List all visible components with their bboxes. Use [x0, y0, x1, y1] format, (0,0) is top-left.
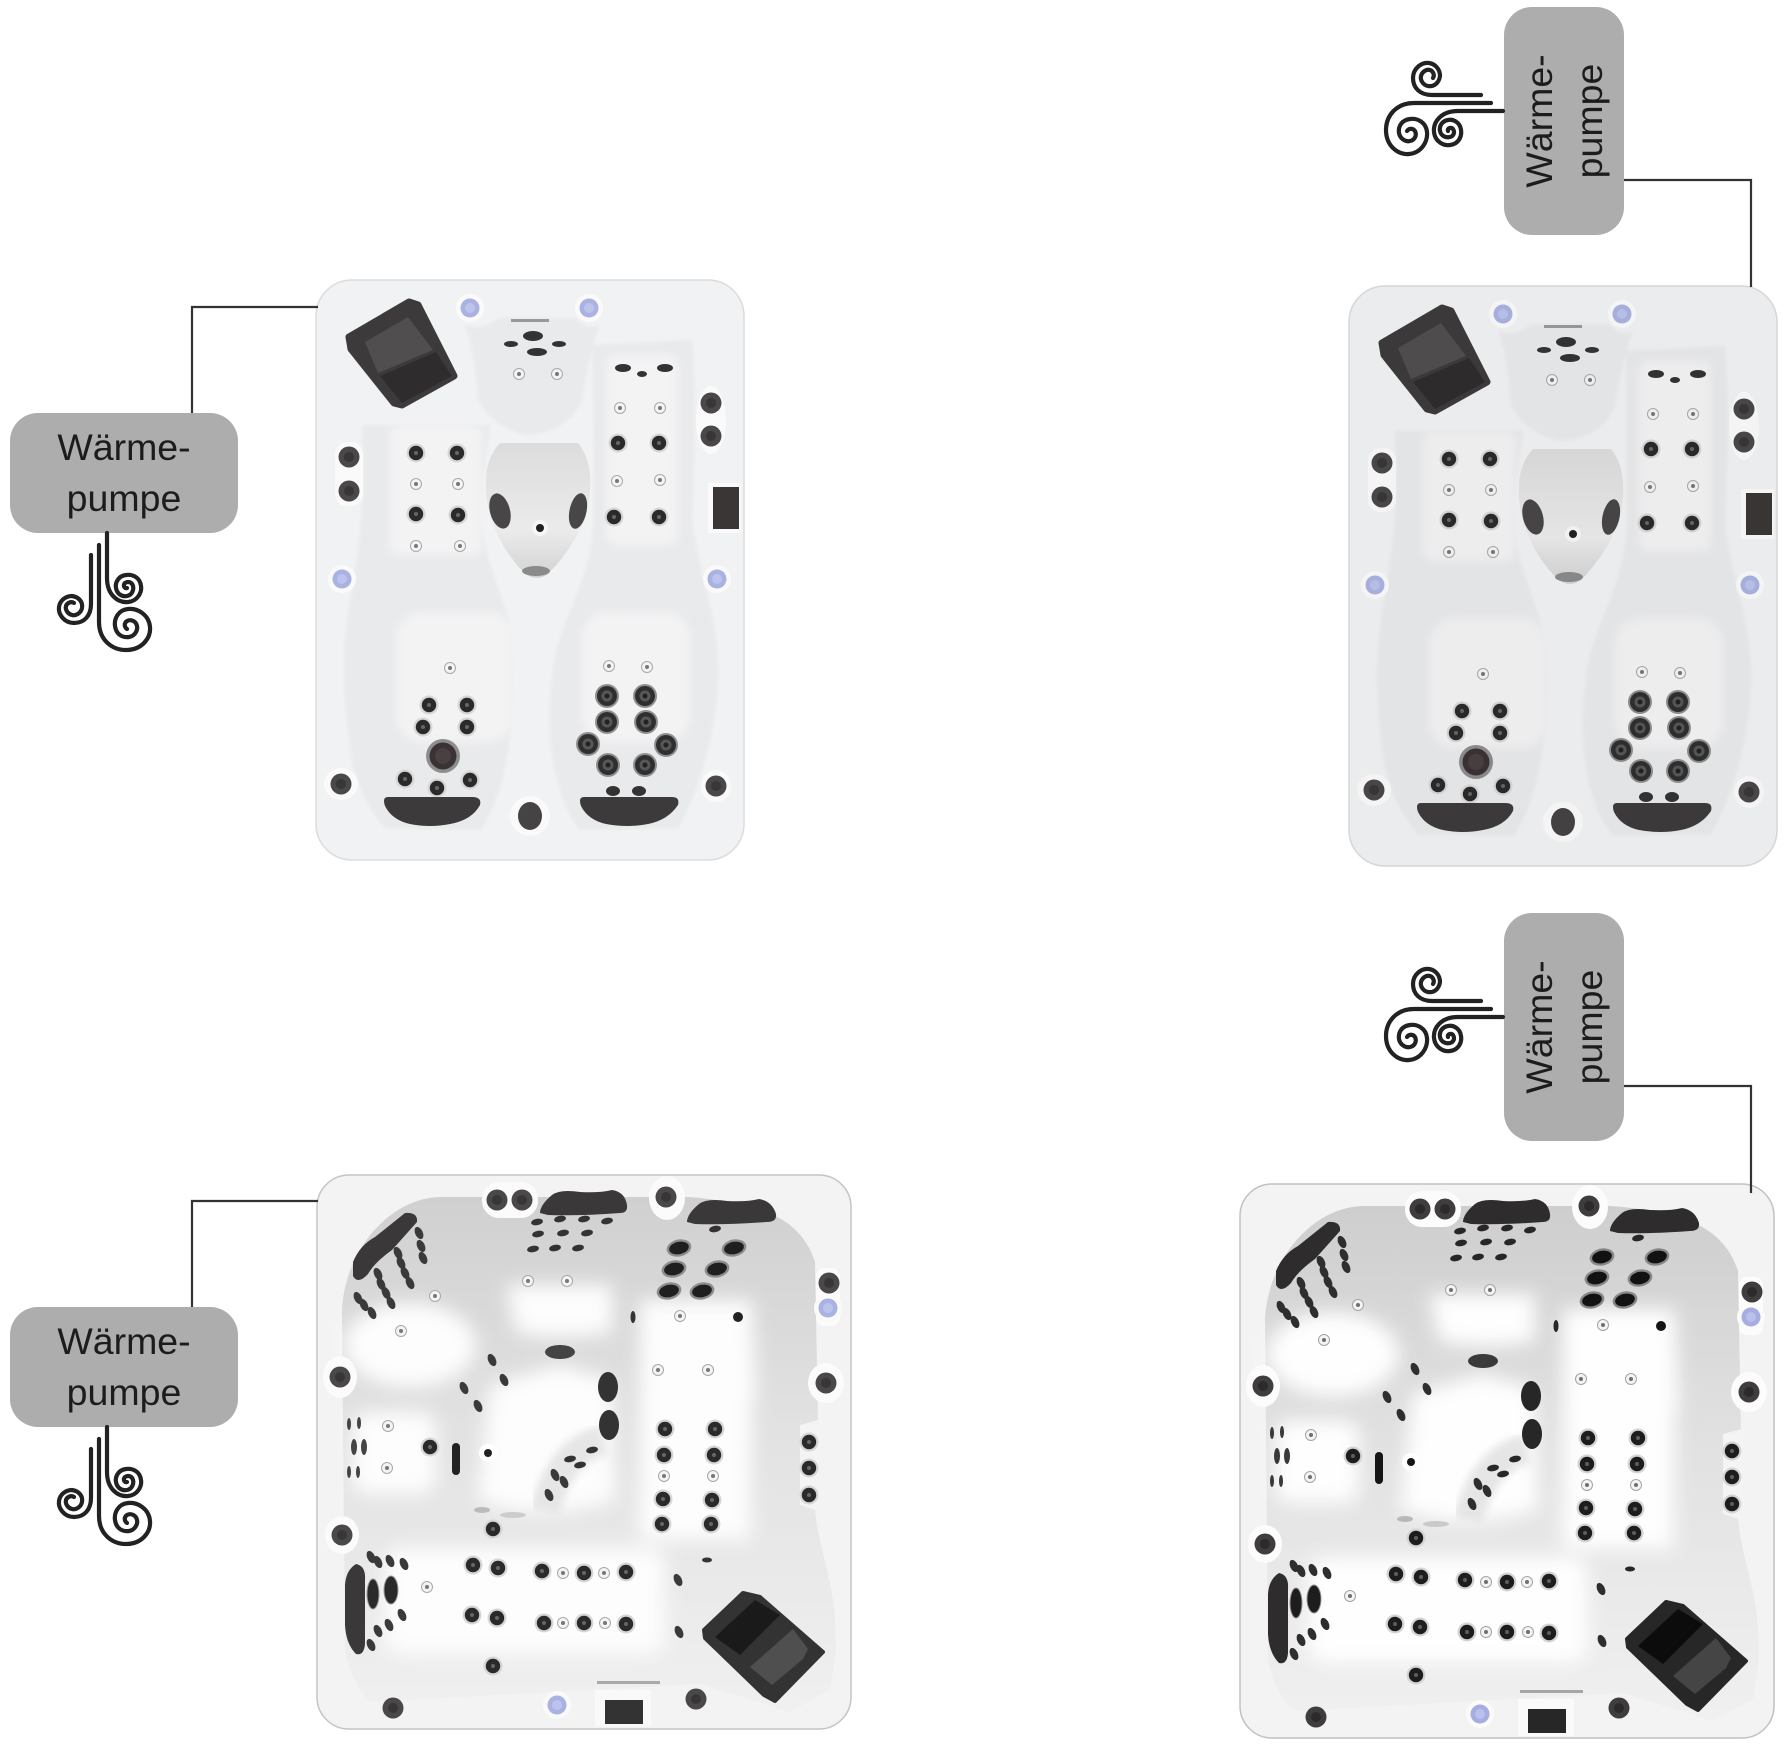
tub: large spa, bottom right [1240, 1184, 1774, 1738]
label text: pumpe [1568, 64, 1610, 178]
footwell cushions [452, 1345, 619, 1518]
jets: left foot area [396, 662, 480, 798]
jets: west seat [347, 1417, 440, 1478]
seat wells [344, 318, 718, 830]
blue lights [328, 294, 731, 593]
label box [1504, 913, 1624, 1141]
connector line [192, 1201, 318, 1307]
jets: back rows [406, 364, 673, 552]
label text: pumpe [1568, 970, 1610, 1084]
label text: Wärme- [1518, 54, 1560, 188]
jets: footwell and arc [458, 1353, 598, 1502]
tub shell [316, 280, 744, 860]
footwell [486, 443, 590, 578]
connector line [1624, 180, 1751, 287]
interior bowl [342, 1197, 836, 1712]
icon: wind [59, 533, 150, 650]
label text: Wärme- [57, 426, 191, 468]
tub: two-seat spa, top right [1349, 286, 1777, 866]
tub: large spa, bottom left [317, 1175, 851, 1729]
jets: right foot area [576, 660, 678, 796]
blue lights [543, 1294, 842, 1719]
heat pump unit: bottom right [1386, 913, 1751, 1193]
label box [10, 1307, 238, 1427]
label box [1504, 7, 1624, 235]
jets: north-east seat [630, 1225, 748, 1376]
label box [10, 413, 238, 533]
valve knobs [330, 1186, 840, 1718]
label text: Wärme- [57, 1320, 191, 1362]
foot pads [384, 797, 678, 826]
label text: pumpe [67, 477, 181, 519]
icon: wind [1386, 969, 1503, 1060]
side hoods [323, 1176, 844, 1727]
jets: north seat [522, 1215, 613, 1286]
heat pump unit: top right [1386, 7, 1751, 287]
jets: lounge column [652, 1420, 818, 1562]
control panel [708, 483, 741, 533]
label text: Wärme- [1518, 960, 1560, 1094]
lumbar panels [390, 355, 690, 742]
tub: two-seat spa, top left [316, 280, 744, 860]
large lounge headrest [704, 1593, 823, 1701]
valve knobs [330, 392, 726, 830]
jets: south bench [422, 1520, 685, 1676]
control panel [597, 1681, 660, 1724]
icon: wind [59, 1427, 150, 1544]
jets: corner seat [352, 1226, 440, 1336]
jets: south-west seat [365, 1550, 410, 1652]
connector line [192, 307, 318, 413]
icon: wind [1386, 63, 1503, 154]
heat pump unit: bottom left [10, 1201, 318, 1544]
connector line [1624, 1086, 1751, 1193]
tub shell [317, 1175, 851, 1729]
jets: top alcove [504, 319, 566, 380]
heat pump unit: top left [10, 307, 318, 650]
lit seat surfaces [344, 1285, 756, 1654]
headrest [349, 302, 454, 405]
knob hoods [324, 386, 731, 836]
footwell pads and drain [486, 491, 590, 576]
pillows [345, 1190, 776, 1654]
footwell arc band [545, 1440, 604, 1512]
label text: pumpe [67, 1371, 181, 1413]
